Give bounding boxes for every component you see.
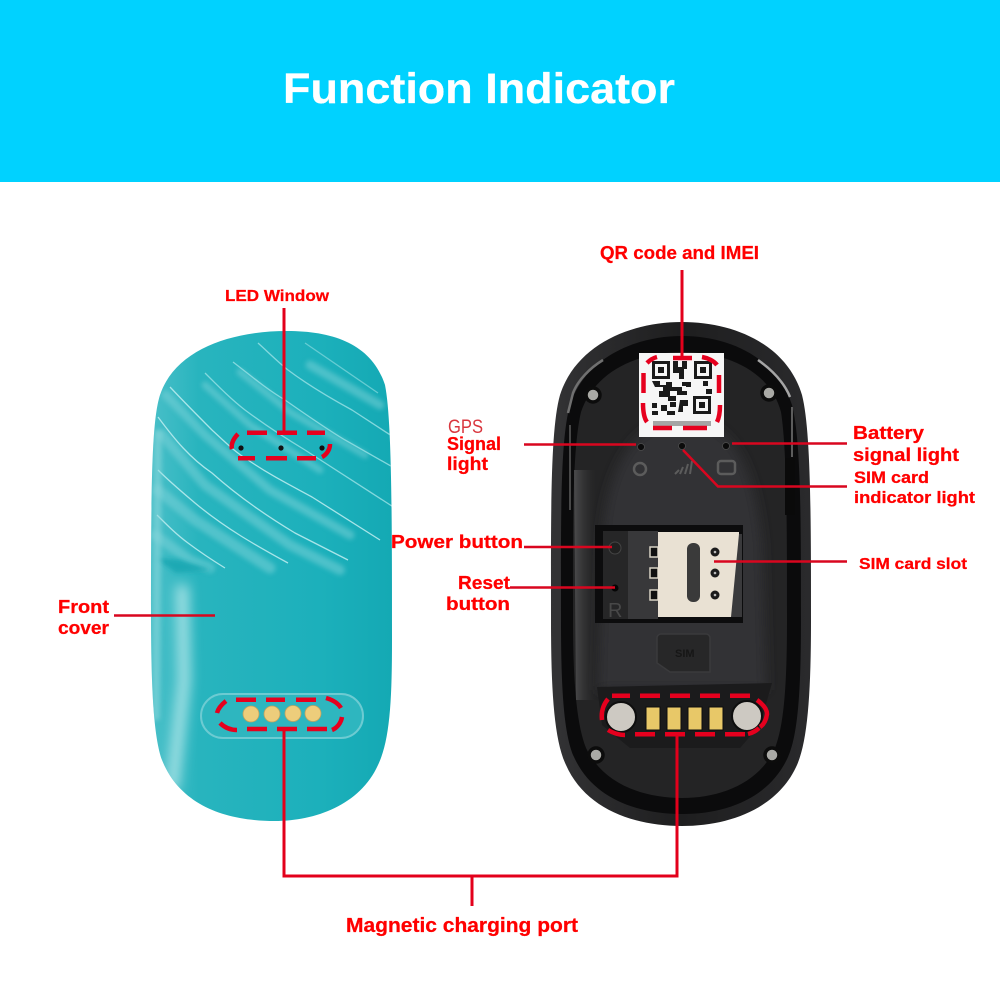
callout: reset button: Reset [458,573,510,593]
header banner [0,0,1000,182]
callout: GPS signal light: Signal [447,434,501,454]
QR label [639,353,724,437]
callout: GPS signal light [447,417,636,474]
SIM emboss: SIM [675,648,695,660]
charging pins [243,706,321,722]
decorative screws [586,386,779,762]
power and reset buttons [609,542,621,554]
stripe highlights [157,343,398,568]
callout: power button: Power button [391,532,523,552]
callout: reset button: button [446,594,510,614]
callout: battery signal light: signal light [853,445,959,465]
callout: LED window [225,288,330,458]
indicator icons [634,461,735,475]
callout: front cover: cover [58,618,109,638]
callout: battery signal light [732,423,959,465]
callout: LED window: LED Window [225,288,330,305]
callout: QR code and IMEI [600,243,759,428]
callout: front cover: Front [58,597,109,617]
indicator lights [638,442,730,450]
charging contacts plate [597,683,772,748]
SIM bay [595,525,743,623]
callout: SIM card indicator light: SIM card [854,468,929,487]
panel: front cover device [151,331,398,821]
callout: SIM card indicator light: indicator light [854,488,975,507]
callout: front cover [58,597,215,638]
callout: reset button [446,573,615,614]
title: Function Indicator [283,65,675,113]
panel: back of device [551,322,811,826]
callout: GPS signal light: GPS [448,417,483,438]
SIM bay: R [608,600,622,622]
charging port recess [201,694,363,738]
SIM emboss [657,634,710,672]
callout: GPS signal light: light [447,454,488,474]
interior dome [598,420,766,690]
left gloss [172,585,184,790]
callout: magnetic charging port: Magnetic charging port [346,915,578,937]
callout: magnetic charging port [217,696,767,937]
callout: SIM card indicator light [683,450,975,507]
callout: QR code and IMEI: QR code and IMEI [600,243,759,263]
callout: battery signal light: Battery [853,423,924,443]
LED window dots [238,445,325,451]
callout: SIM card slot: SIM card slot [859,556,968,573]
